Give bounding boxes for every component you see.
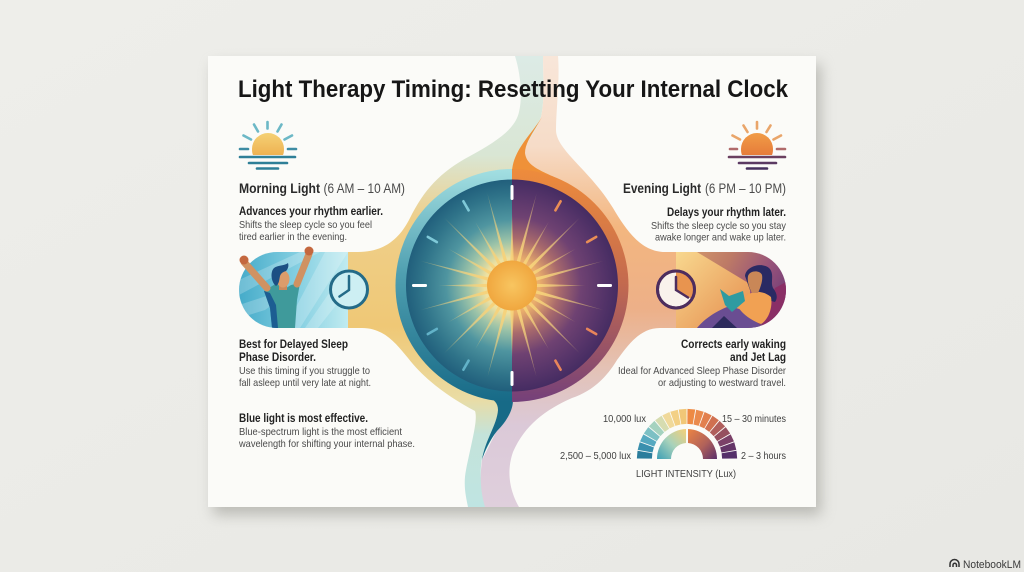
text: corrects early waking and jet lag: or adjusting to westward travel. bbox=[658, 377, 786, 389]
person: neck bbox=[279, 282, 287, 290]
cushion bbox=[762, 282, 786, 328]
clock hour ticks bbox=[412, 185, 612, 386]
text: delays your rhythm: awake longer and wake up later. bbox=[655, 232, 786, 244]
watermark: NotebookLM: NotebookLM bbox=[963, 559, 1021, 571]
heading: evening light bbox=[623, 181, 786, 196]
person: dark torso shadow bbox=[264, 291, 278, 328]
text: advances your rhythm: Advances your rhythm earlier. bbox=[239, 204, 383, 218]
icon: morning clock bbox=[330, 271, 368, 308]
gauge inner arc: evening bbox=[688, 429, 717, 459]
text: delays your rhythm: Shifts the sleep cycle so you stay bbox=[651, 220, 787, 232]
panel: infographic card bbox=[208, 56, 816, 507]
ribbon: left morning band bbox=[348, 56, 544, 507]
text: corrects early waking and jet lag bbox=[618, 337, 786, 389]
heading: evening light: Evening Light bbox=[623, 181, 701, 196]
text: corrects early waking and jet lag: Corrects early waking bbox=[681, 337, 786, 351]
ribbon: right evening band bbox=[481, 56, 676, 507]
text: corrects early waking and jet lag: Ideal for Advanced Sleep Phase Disorder bbox=[618, 365, 786, 377]
gauge label: 15 – 30 minutes: 15 – 30 minutes bbox=[722, 413, 786, 425]
gauge label: 2,500 – 5,000 lux: 2,500 – 5,000 lux bbox=[560, 450, 632, 462]
text: best for delayed sleep phase disorder: Phase Disorder. bbox=[239, 350, 316, 364]
sun core bbox=[487, 260, 537, 310]
illustration: evening reader pill bbox=[676, 252, 786, 328]
text: blue light is most effective bbox=[238, 411, 415, 450]
gauge label: 10,000 lux: 10,000 lux bbox=[603, 413, 647, 425]
clock outer ring: evening half bbox=[512, 169, 628, 402]
heading: morning light bbox=[239, 181, 405, 196]
ribbon: teal bottom tail bbox=[482, 396, 513, 460]
clock outer ring: morning half bbox=[396, 169, 512, 400]
text: delays your rhythm: Delays your rhythm later. bbox=[667, 205, 786, 219]
reader: book bbox=[720, 289, 745, 312]
text: advances your rhythm bbox=[239, 204, 383, 243]
person: hair bbox=[272, 263, 288, 286]
reader: sweater bbox=[738, 292, 771, 324]
person: left fist bbox=[240, 256, 248, 264]
heading: morning light: (6 AM – 10 AM) bbox=[324, 181, 405, 196]
lamp light wedge bbox=[676, 252, 750, 328]
text: best for delayed sleep phase disorder bbox=[239, 337, 371, 389]
icon: sunset bbox=[729, 122, 785, 168]
reader: legs bbox=[697, 306, 762, 328]
heading: morning light: Morning Light bbox=[239, 181, 320, 196]
ribbon: orange top accent bbox=[512, 117, 570, 190]
text: advances your rhythm: tired earlier in the evening. bbox=[239, 231, 347, 243]
text: best for delayed sleep phase disorder: fall asleep until very late at night. bbox=[239, 377, 371, 389]
clock face: morning half bbox=[406, 180, 512, 392]
clock face: evening half bbox=[512, 180, 618, 392]
icon: evening clock bbox=[658, 271, 695, 308]
person: shirt bbox=[264, 283, 300, 328]
text: corrects early waking and jet lag: and Jet Lag bbox=[730, 350, 786, 364]
person: face bbox=[276, 270, 290, 288]
reader: face bbox=[748, 271, 762, 293]
text: blue light is most effective: Blue light is most effective. bbox=[239, 411, 368, 425]
gauge caption: LIGHT INTENSITY (Lux) bbox=[636, 468, 736, 480]
icon: sunrise bbox=[240, 122, 296, 168]
person: raised arm left bbox=[244, 262, 267, 288]
reader: leg shadow bbox=[712, 316, 737, 328]
text: best for delayed sleep phase disorder: Use this timing if you struggle to bbox=[239, 365, 370, 377]
person: right fist bbox=[304, 246, 314, 256]
sun rays bbox=[420, 193, 604, 377]
person: raised arm right bbox=[297, 254, 309, 284]
text: delays your rhythm bbox=[651, 205, 787, 244]
gauge outer segments bbox=[637, 409, 737, 460]
text: best for delayed sleep phase disorder: Best for Delayed Sleep bbox=[239, 337, 348, 351]
text: blue light is most effective: wavelength for shifting your internal phase. bbox=[238, 438, 415, 450]
reader: hair bbox=[745, 265, 777, 302]
title: Light Therapy Timing: Resetting Your Internal Clock bbox=[238, 76, 789, 103]
illustration: morning person pill bbox=[239, 246, 348, 328]
heading: evening light: (6 PM – 10 PM) bbox=[705, 181, 786, 196]
light beams bbox=[239, 252, 348, 328]
chart: light intensity gauge bbox=[560, 409, 786, 480]
gauge inner arc: morning bbox=[657, 429, 686, 459]
clock dial bbox=[396, 169, 628, 402]
text: advances your rhythm: Shifts the sleep cycle so you feel bbox=[239, 219, 372, 231]
text: blue light is most effective: Blue-spectrum light is the most efficient bbox=[239, 426, 402, 438]
gauge label: 2 – 3 hours: 2 – 3 hours bbox=[741, 450, 786, 462]
